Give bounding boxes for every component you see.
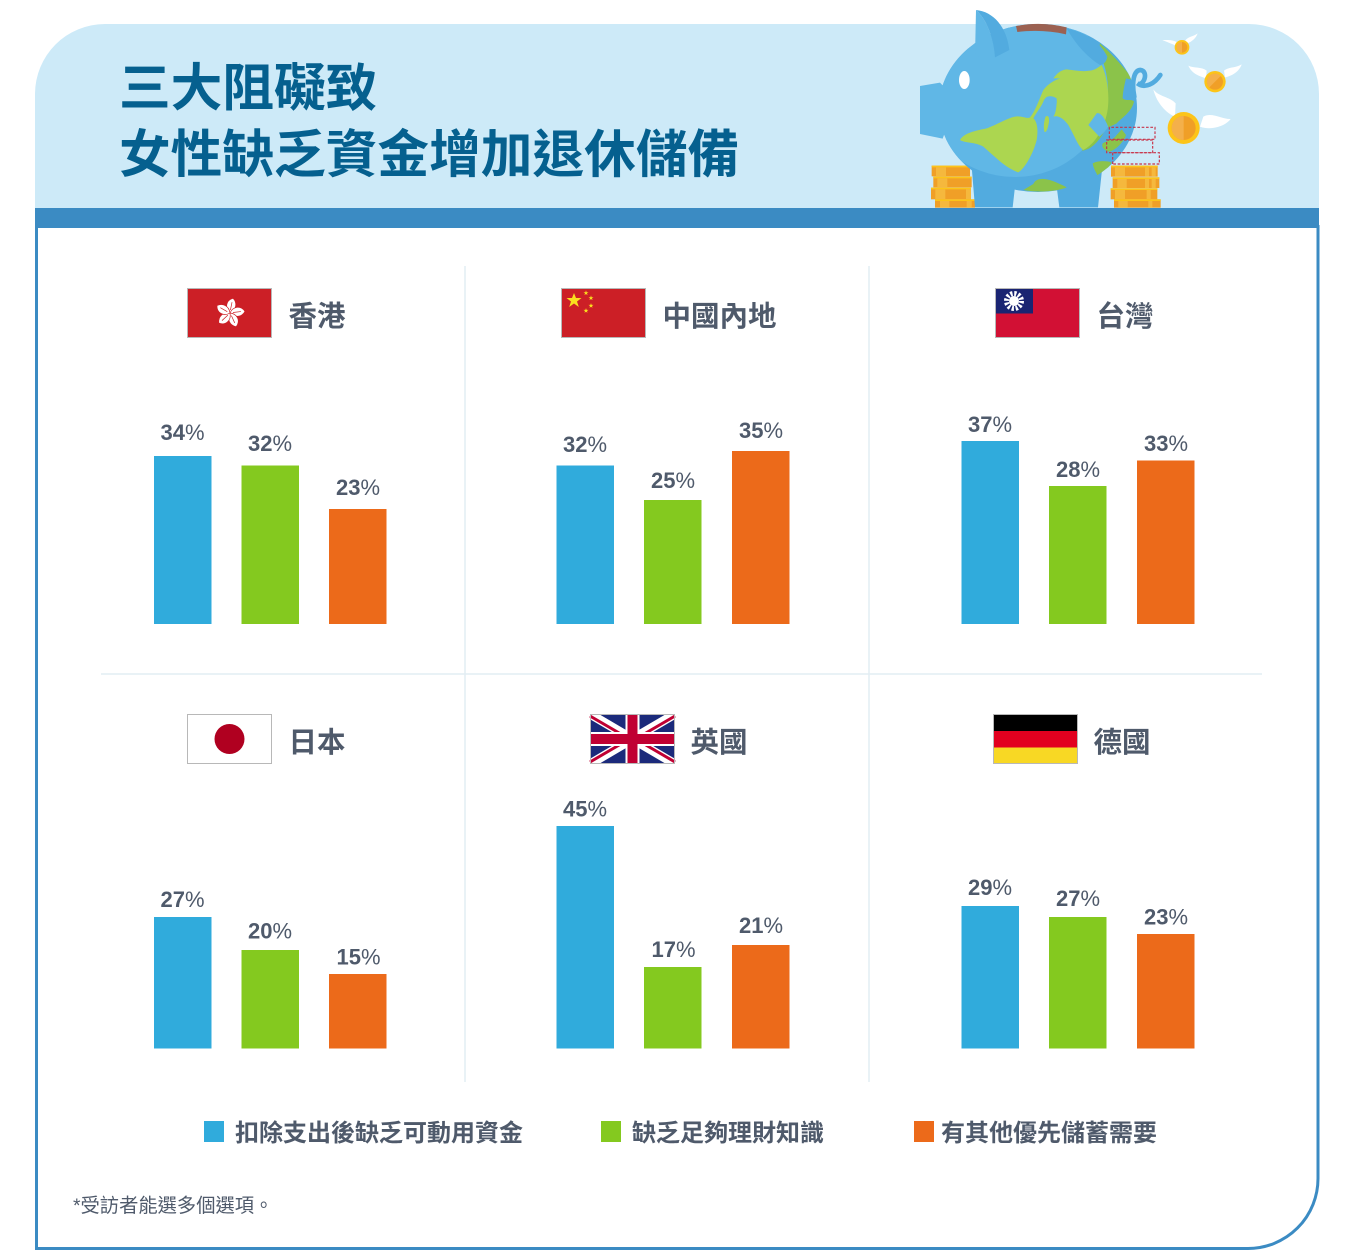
flag: United Kingdom (590, 714, 675, 764)
title: 女性缺乏資金增加退休儲備 (119, 126, 739, 184)
pig light face (942, 24, 1108, 177)
bar chart: Mainland China (556, 418, 790, 624)
bar chart: Hong Kong: 34% (160, 420, 205, 445)
icon: medium flying coin (1188, 64, 1242, 92)
icon: large flying coin (1153, 89, 1231, 144)
coin slot (1016, 24, 1067, 34)
pig eye (959, 71, 970, 89)
flag: Germany (993, 714, 1078, 764)
bar chart: Germany (962, 875, 1194, 1048)
pig ear (975, 10, 995, 57)
pig tail (1133, 70, 1160, 97)
title (119, 59, 739, 184)
bar chart: Japan: 20% (248, 918, 292, 944)
icon: coin stack left (931, 166, 975, 208)
bar chart: Hong Kong (154, 420, 386, 624)
globe dark green land (1023, 43, 1134, 191)
panel: Hong Kong (154, 288, 386, 624)
bar chart: United Kingdom: 21% (739, 913, 783, 938)
heading: 台灣: 台灣 (1096, 300, 1154, 333)
flag: Hong Kong (188, 288, 272, 338)
bar chart: Germany: 29% (968, 875, 1012, 900)
heading: 日本: 日本 (288, 727, 346, 759)
pig ear shade (976, 10, 1009, 57)
pig snout (920, 83, 957, 139)
panel: Mainland China (556, 288, 790, 624)
bar chart: Mainland China: 35% (739, 418, 783, 443)
divider: vertical left (464, 266, 466, 1082)
bar chart: United Kingdom: 17% (651, 937, 696, 962)
bar chart: United Kingdom (556, 796, 790, 1048)
header band (35, 208, 1319, 227)
bar chart: Mainland China: 25% (651, 468, 695, 493)
bar chart: United Kingdom: 45% (563, 796, 607, 822)
panel: Japan (154, 714, 386, 1048)
flag: Taiwan (996, 288, 1080, 338)
bar chart: Germany: 23% (1144, 904, 1188, 930)
india sea patch (1088, 113, 1108, 137)
bar chart: Japan (154, 887, 386, 1048)
content panel (36, 226, 1318, 1248)
footnote: *受訪者能選多個選項。 (73, 1195, 273, 1217)
heading: 中國內地: 中國內地 (662, 301, 777, 333)
legend item: blue: 扣除支出後缺乏可動用資金 (235, 1119, 523, 1147)
header background (35, 24, 1319, 208)
pig upper shade (1067, 28, 1107, 65)
dashed annotation boxes (1107, 127, 1159, 164)
panel: United Kingdom (556, 714, 790, 1048)
icon: small flying coin (1162, 33, 1198, 55)
flag: Japan (188, 714, 272, 764)
bar chart: Japan: 15% (336, 944, 381, 970)
icon: piggy bank globe (920, 3, 1242, 208)
bar chart: Germany: 27% (1056, 886, 1100, 911)
globe inner sea (1045, 96, 1057, 115)
bar chart: Taiwan: 33% (1144, 431, 1188, 456)
legend item: orange: 有其他優先儲蓄需要 (941, 1120, 1157, 1147)
bar chart: Japan: 27% (160, 887, 205, 912)
bar chart: Mainland China: 32% (563, 432, 607, 457)
bar chart: Taiwan: 28% (1056, 457, 1100, 482)
divider: horizontal (101, 673, 1262, 675)
flag: China (562, 288, 646, 338)
globe light green land (960, 65, 1108, 172)
legend (204, 1119, 1157, 1147)
bar chart: Taiwan (962, 412, 1194, 624)
bar chart: Taiwan: 37% (968, 412, 1012, 437)
panel: Taiwan (962, 288, 1194, 624)
title: 三大阻礙致 (119, 59, 377, 117)
bar chart: Hong Kong: 32% (248, 431, 292, 456)
pig legs (972, 167, 1102, 207)
panel: Germany (962, 714, 1194, 1048)
globe sliver land (1044, 116, 1049, 132)
bar chart: Hong Kong: 23% (336, 475, 380, 500)
divider: vertical right (868, 266, 870, 1082)
heading: 德國: 德國 (1094, 727, 1151, 759)
heading: 英國: 英國 (690, 727, 748, 759)
heading: 香港: 香港 (288, 301, 346, 333)
pig body (939, 24, 1137, 192)
legend item: green: 缺乏足夠理財知識 (632, 1120, 824, 1147)
icon: coin stack right (1111, 166, 1161, 208)
